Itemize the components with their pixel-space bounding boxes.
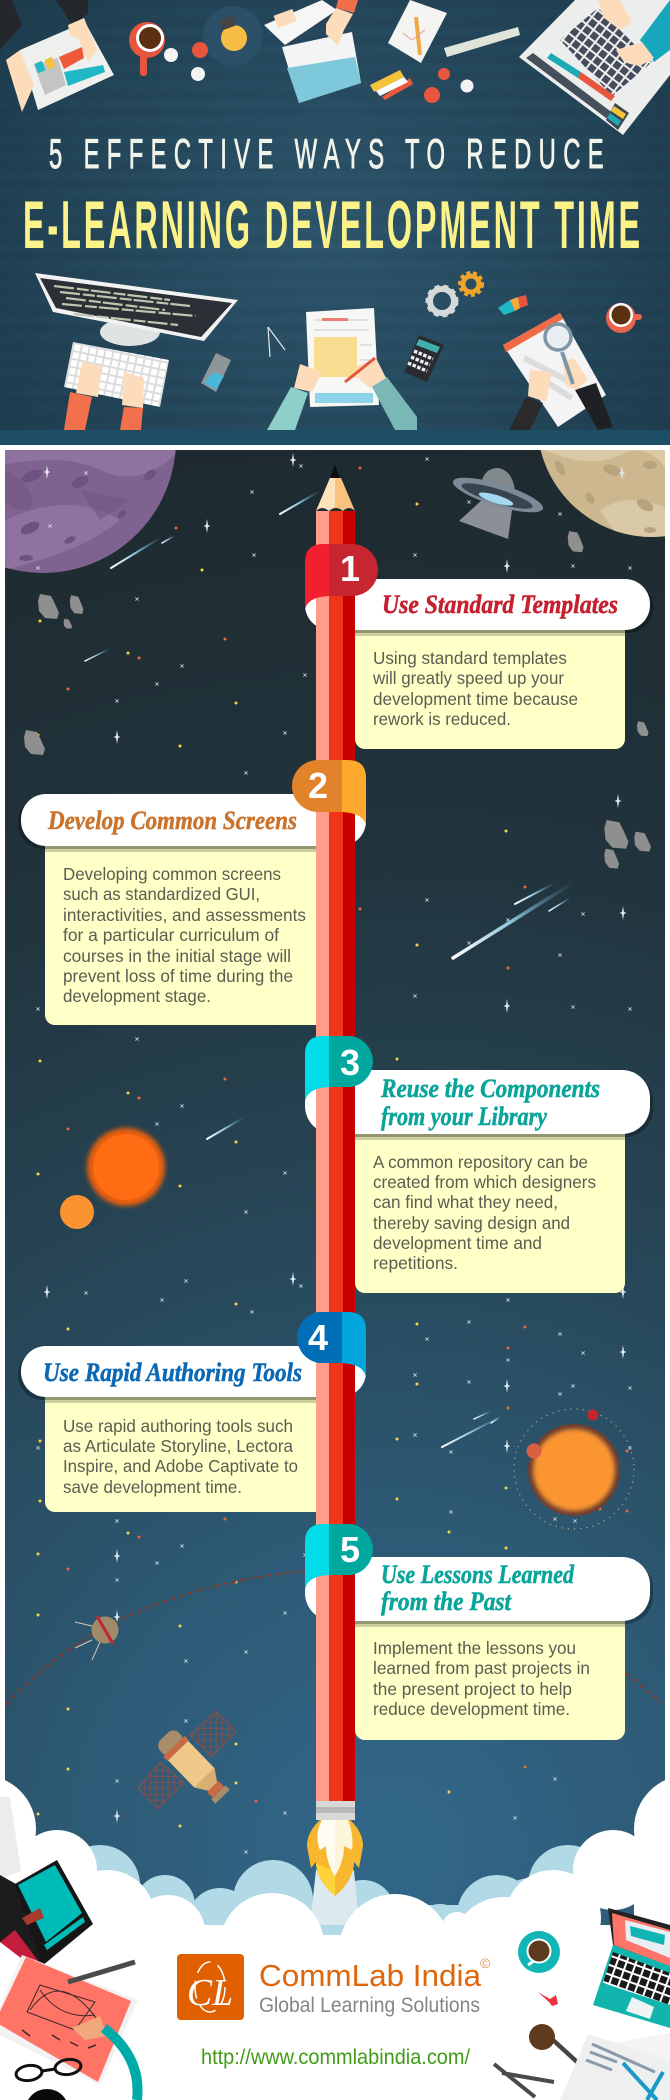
number badge 1: 1	[340, 548, 360, 589]
space panel	[5, 450, 665, 1935]
heading 3: Reuse the Components	[380, 1074, 600, 1103]
body text 1	[372, 648, 578, 729]
body text 4: Use rapid authoring tools such	[63, 1416, 293, 1436]
hand	[72, 2016, 107, 2040]
icon: UFO	[450, 468, 546, 539]
body text 2: interactivities, and assessments	[63, 905, 306, 925]
body text 4	[63, 1416, 298, 1497]
body text 5: learned from past projects in	[373, 1658, 590, 1678]
laptop	[593, 1908, 670, 2028]
body text 3: A common repository can be	[373, 1152, 588, 1172]
cloud: light blue layer	[89, 1845, 601, 1935]
body text 2	[63, 864, 306, 1006]
number badge 4	[297, 1312, 366, 1378]
lollipop ball and stick	[529, 2024, 588, 2072]
icon: tablet with hands	[0, 0, 114, 112]
body text 2: development stage.	[63, 986, 211, 1006]
glasses	[15, 2058, 82, 2082]
icon: laptop with hands	[519, 0, 670, 135]
heading 3	[380, 1074, 600, 1131]
number badge 3: 3	[340, 1042, 360, 1083]
icon: wireframe sheet with hands	[267, 308, 417, 430]
icon: asteroids	[24, 531, 651, 869]
body text 3	[373, 1152, 596, 1273]
panel 3 back: title bar and card	[305, 1070, 653, 1293]
body text 1: development time because	[373, 689, 578, 709]
body text 3: development time and	[373, 1233, 542, 1253]
heading 5	[381, 1560, 575, 1616]
footer logo	[177, 1954, 244, 2020]
body text 5: reduce development time.	[373, 1699, 570, 1719]
flame	[307, 1820, 363, 1896]
number badge 2	[292, 760, 366, 826]
body text 2: such as standardized GUI,	[63, 884, 260, 904]
stars: yellow dots	[36, 502, 508, 1828]
body text 1: will greatly speed up your	[372, 668, 564, 688]
pencil smoke	[310, 1870, 359, 1925]
icon: keyboard with hands	[64, 342, 169, 430]
open book	[0, 1860, 93, 1966]
body text 4: as Articulate Storyline, Lectora	[63, 1436, 293, 1456]
number badge 5: 5	[340, 1529, 360, 1570]
icon: report with pencil	[388, 0, 447, 63]
icon: colour swatch	[498, 295, 528, 315]
number badge 3	[305, 1036, 373, 1102]
icon: ruler	[444, 27, 520, 57]
icon: calculator	[404, 335, 444, 382]
heading 1: Use Standard Templates	[382, 590, 618, 619]
icon: gears	[427, 272, 482, 316]
heading 3: from your Library	[381, 1102, 547, 1131]
footer illustration: left desk	[0, 1797, 138, 2100]
body text 2: prevent loss of time during the	[63, 966, 293, 986]
body text 3: created from which designers	[373, 1172, 596, 1192]
website url: http://www.commlabindia.com/	[201, 2046, 470, 2069]
number badge 1	[305, 544, 378, 610]
notes paper	[560, 2033, 670, 2100]
paper sheet	[0, 1797, 21, 1879]
heading 5: Use Lessons Learned	[381, 1560, 575, 1589]
icon: sticky notes	[370, 70, 413, 100]
copyright mark: ©	[480, 1955, 491, 1971]
body text 1: Using standard templates	[373, 648, 567, 668]
pencils	[494, 2064, 554, 2097]
teal sleeve	[104, 2028, 138, 2100]
pencil	[68, 1962, 135, 1982]
icon: phone	[201, 353, 231, 392]
pin	[538, 1992, 558, 2006]
sketch sheet	[0, 1955, 138, 2085]
heading 5: from the Past	[381, 1587, 512, 1616]
heading 2: Develop Common Screens	[47, 806, 297, 835]
icon: small satellite	[75, 1616, 118, 1660]
number badge 2: 2	[308, 765, 328, 806]
head	[25, 2089, 69, 2100]
panel 2 back: title bar and card	[18, 794, 366, 1025]
dashed orbit path	[6, 1571, 662, 1705]
panel 1 back: title bar and card	[305, 579, 653, 749]
icon: monitor	[35, 273, 238, 346]
body text 2: Developing common screens	[63, 864, 281, 884]
icon: comets	[85, 492, 570, 1447]
body text 2: for a particular curriculum of	[63, 925, 279, 945]
icon: coffee cup	[129, 22, 165, 76]
body text 4: Inspire, and Adobe Captivate to	[63, 1456, 298, 1476]
icon: small badges	[164, 42, 474, 103]
planet: orange pair	[60, 1128, 165, 1229]
pencil rocket	[307, 465, 363, 1896]
body text 5: Implement the lessons you	[373, 1638, 576, 1658]
body text 3: thereby saving design and	[373, 1213, 570, 1233]
tagline: Global Learning Solutions	[259, 1994, 480, 2017]
heading 4: Use Rapid Authoring Tools	[43, 1358, 302, 1387]
icon: documents and hand	[264, 0, 361, 103]
body text 5	[373, 1638, 590, 1719]
footer illustration: right desk	[494, 1908, 670, 2100]
cloud: white layer	[0, 1775, 670, 2100]
number badge 4: 4	[308, 1317, 328, 1358]
panel 5 back: title bar and card	[305, 1557, 653, 1740]
body text 1: rework is reduced.	[373, 709, 511, 729]
number badge 5	[305, 1524, 373, 1590]
planet: ringed orange with moons	[514, 1409, 634, 1529]
panel 4 back: title bar and card	[18, 1346, 366, 1512]
stars: orange dots	[66, 466, 628, 1802]
header panel	[0, 0, 670, 445]
body text 2: courses in the initial stage will	[63, 946, 291, 966]
icon: light bulb	[203, 6, 263, 66]
coffee cup	[518, 1931, 560, 1973]
icon: document with magnifier	[503, 313, 613, 430]
body text 3: repetitions.	[373, 1253, 458, 1273]
body text 5: the present project to help	[373, 1679, 572, 1699]
planet: tan	[540, 450, 665, 537]
icon: large satellite	[138, 1711, 236, 1809]
icon: coffee cup lower	[606, 303, 642, 333]
body text 4: save development time.	[63, 1477, 242, 1497]
brand name: CommLab India	[259, 1958, 482, 1993]
icon: compass	[268, 327, 285, 357]
footer logo: CL	[187, 1972, 233, 2014]
planet: purple	[5, 450, 176, 573]
body text 3: can find what they need,	[373, 1192, 558, 1212]
stars: white crosses	[36, 453, 632, 1854]
